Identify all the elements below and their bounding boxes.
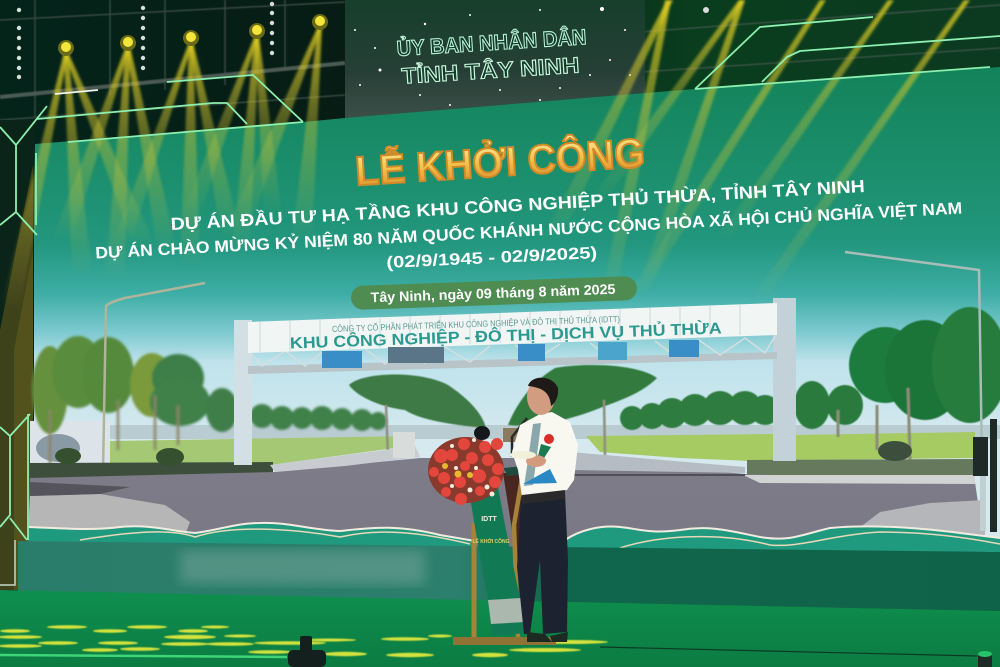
street lamps: [102, 252, 983, 530]
belt: [522, 490, 565, 504]
distant vehicles: [393, 428, 519, 458]
camera silhouette: [288, 636, 326, 667]
horizon haze: [35, 425, 1000, 439]
lighting truss: [0, 0, 1000, 120]
date pill: Tây Ninh, ngày 09 tháng 8 năm 2025: [370, 281, 616, 305]
tree line right: [794, 307, 1000, 460]
stage lamps: [58, 14, 328, 56]
podium: [453, 465, 556, 645]
blue folder: [523, 469, 557, 484]
low building left: [30, 421, 110, 463]
tree line left: [32, 336, 387, 465]
curbs and pavement: [28, 446, 985, 535]
head: [527, 379, 555, 415]
hanging LED strings: [17, 2, 709, 79]
road surface: [28, 458, 985, 552]
subtitle line 1: DỰ ÁN ĐẦU TƯ HẠ TẦNG KHU CÔNG NGHIỆP THỦ THỪA, TỈNH TÂY NINH: [170, 175, 865, 234]
LED screen background: [28, 67, 1000, 552]
green LED strip: [0, 655, 287, 657]
stage skirt band: [18, 541, 1000, 611]
sign panel: Ủy ban nhân dân: ỦY BAN NHÂN DÂN: [396, 24, 587, 61]
shoes: [527, 632, 568, 642]
gate structure: KHU CÔNG NGHIỆP - ĐÔ THỊ - DỊCH VỤ THỦ THỪA: [290, 318, 722, 353]
sign panel: Ủy ban nhân dân: [345, 0, 645, 118]
light beams: [0, 0, 970, 310]
tie: [524, 423, 541, 486]
grass lawns: [110, 432, 975, 466]
wave decoration: [28, 523, 1000, 552]
skirt reflection: [180, 550, 425, 585]
gate structure: [234, 298, 796, 465]
right speaker stand: [973, 419, 997, 532]
corsage: [544, 434, 554, 444]
left column pylon: [0, 120, 34, 592]
flower arrangement: [428, 437, 504, 505]
gate structure: CÔNG TY CỔ PHẦN PHÁT TRIỂN KHU CÔNG NGHIỆP VÀ ĐÔ THỊ THỦ THỪA (IDTT): [332, 313, 620, 334]
avenue trees centre: [349, 365, 780, 457]
left base frame: [0, 540, 15, 585]
sign panel: Ủy ban nhân dân: TỈNH TÂY NINH: [401, 52, 580, 89]
floor cable: [600, 647, 977, 656]
neon frame lines: [0, 17, 1000, 540]
title: Lễ khởi công: LỄ KHỞI CÔNG: [354, 130, 646, 194]
paper: [510, 451, 536, 459]
stage floor: [0, 590, 1000, 667]
floor spotlight: [978, 651, 992, 667]
microphone: [474, 418, 527, 457]
trousers: [517, 492, 568, 634]
hair: [528, 378, 558, 406]
date pill: [351, 276, 637, 310]
date range: (02/9/1945 - 02/9/2025): [386, 244, 598, 272]
shirt: [512, 412, 578, 497]
hand: [526, 455, 546, 467]
floor light spots: [0, 625, 608, 657]
podium: IDTT: [481, 516, 497, 523]
subtitle line 2: DỰ ÁN CHÀO MỪNG KỶ NIỆM 80 NĂM QUỐC KHÁNH NƯỚC CỘNG HÒA XÃ HỘI CHỦ NGHĨA VIỆT NAM: [95, 198, 963, 262]
speaker figure: [510, 378, 578, 642]
podium: LỄ KHỞI CÔNG: [472, 537, 510, 545]
hedges: [30, 441, 975, 479]
